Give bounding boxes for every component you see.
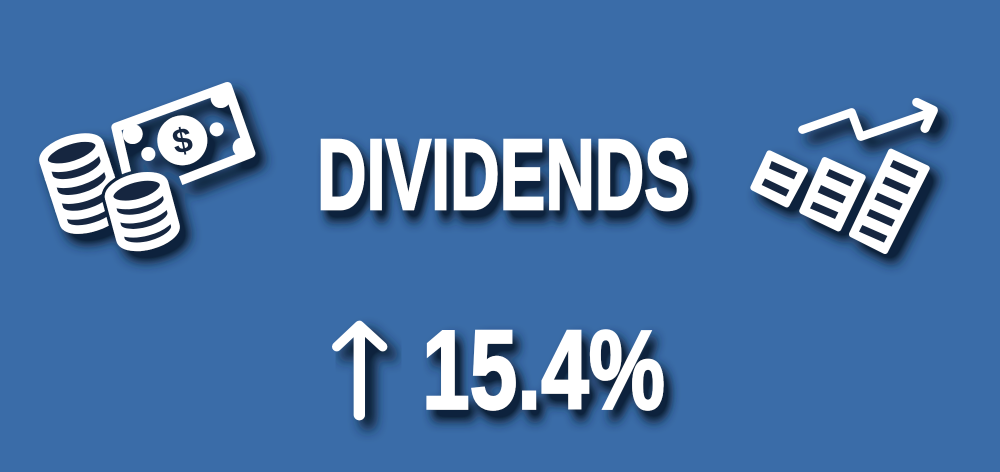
title: DIVIDENDS: DIVIDENDS xyxy=(317,119,690,231)
icon: banknote: $ xyxy=(169,121,196,162)
icon: tall bar xyxy=(852,152,927,251)
icon: tall coin stack xyxy=(40,132,124,236)
statistic: 15.4%: 15.4% xyxy=(422,309,665,433)
icon: coins and banknote xyxy=(40,87,253,252)
icon: short coin stack xyxy=(106,171,179,252)
infographic canvas xyxy=(38,82,954,437)
icon: up arrow xyxy=(337,325,383,415)
icon: middle bar xyxy=(802,160,863,228)
icon: rising bars and trend arrow xyxy=(753,102,933,251)
icon: short bar xyxy=(753,153,805,204)
icon: banknote xyxy=(116,87,253,181)
icon: trend arrow xyxy=(802,102,933,137)
